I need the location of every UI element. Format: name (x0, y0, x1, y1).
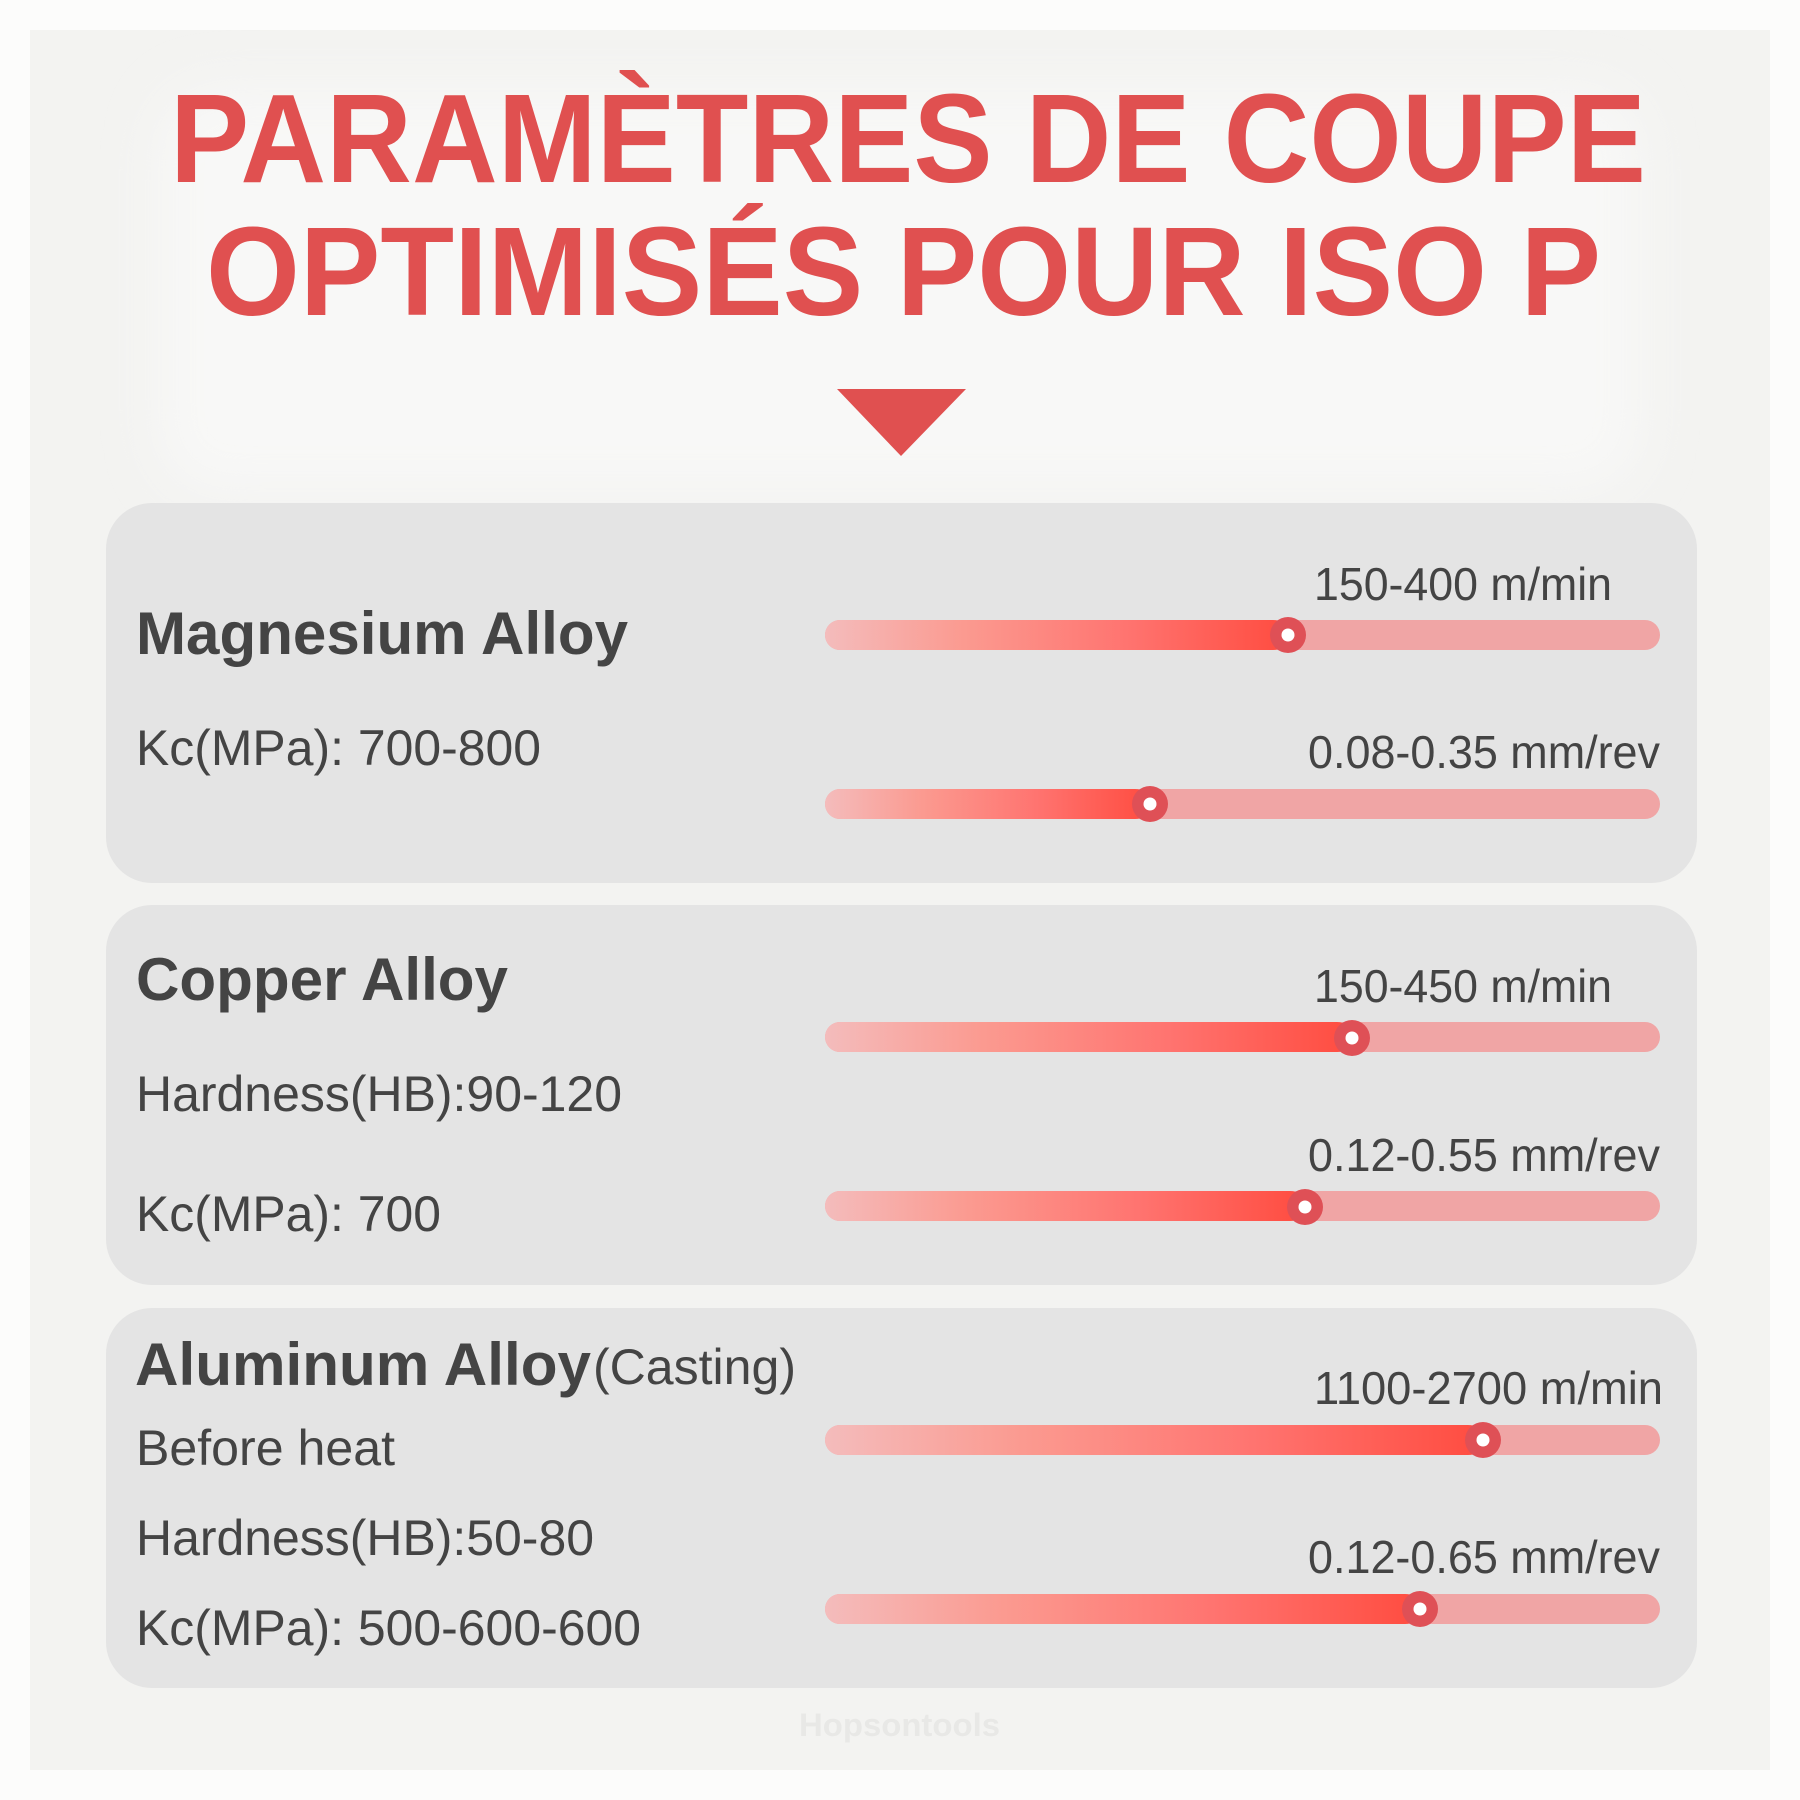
label: feed: 0.08-0.35 mm/rev (1308, 726, 1660, 778)
slider: feed (825, 1189, 1660, 1225)
title (170, 68, 1646, 342)
label: feed: 0.12-0.55 mm/rev (1308, 1129, 1660, 1181)
panel: Magnesium Alloy (106, 503, 1697, 883)
heading: Copper Alloy: Copper Alloy (136, 946, 509, 1013)
label: cutting speed: 1100-2700 m/min (1314, 1362, 1663, 1414)
title: OPTIMISÉS POUR ISO P (206, 201, 1601, 342)
text: Kc: Kc(MPa): 700 (136, 1186, 441, 1242)
heading: Magnesium Alloy: Magnesium Alloy (136, 600, 629, 667)
slider: feed (825, 1591, 1660, 1627)
slider: cutting speed (825, 617, 1660, 653)
text: Kc: Kc(MPa): 700-800 (136, 720, 541, 776)
text: hardness: Hardness(HB):90-120 (136, 1066, 622, 1122)
label: cutting speed: 150-400 m/min (1314, 558, 1612, 610)
slider: cutting speed (825, 1020, 1660, 1056)
text: hardness: Hardness(HB):50-80 (136, 1510, 594, 1566)
panel: Copper Alloy (106, 905, 1697, 1285)
slider: feed (825, 786, 1660, 822)
watermark: Hopsontools (799, 1707, 1000, 1743)
panel: Aluminum Alloy (106, 1308, 1697, 1688)
heading: Aluminum Alloy: Aluminum Alloy (135, 1331, 592, 1398)
label: cutting speed: 150-450 m/min (1314, 960, 1612, 1012)
label: feed: 0.12-0.65 mm/rev (1308, 1531, 1660, 1583)
title: PARAMÈTRES DE COUPE (170, 68, 1646, 209)
text: casting: (Casting) (593, 1339, 796, 1395)
text: Kc: Kc(MPa): 500-600-600 (136, 1600, 641, 1656)
arrow: down triangle (837, 389, 966, 456)
text: before heat: Before heat (136, 1420, 395, 1476)
slider: cutting speed (825, 1422, 1660, 1458)
